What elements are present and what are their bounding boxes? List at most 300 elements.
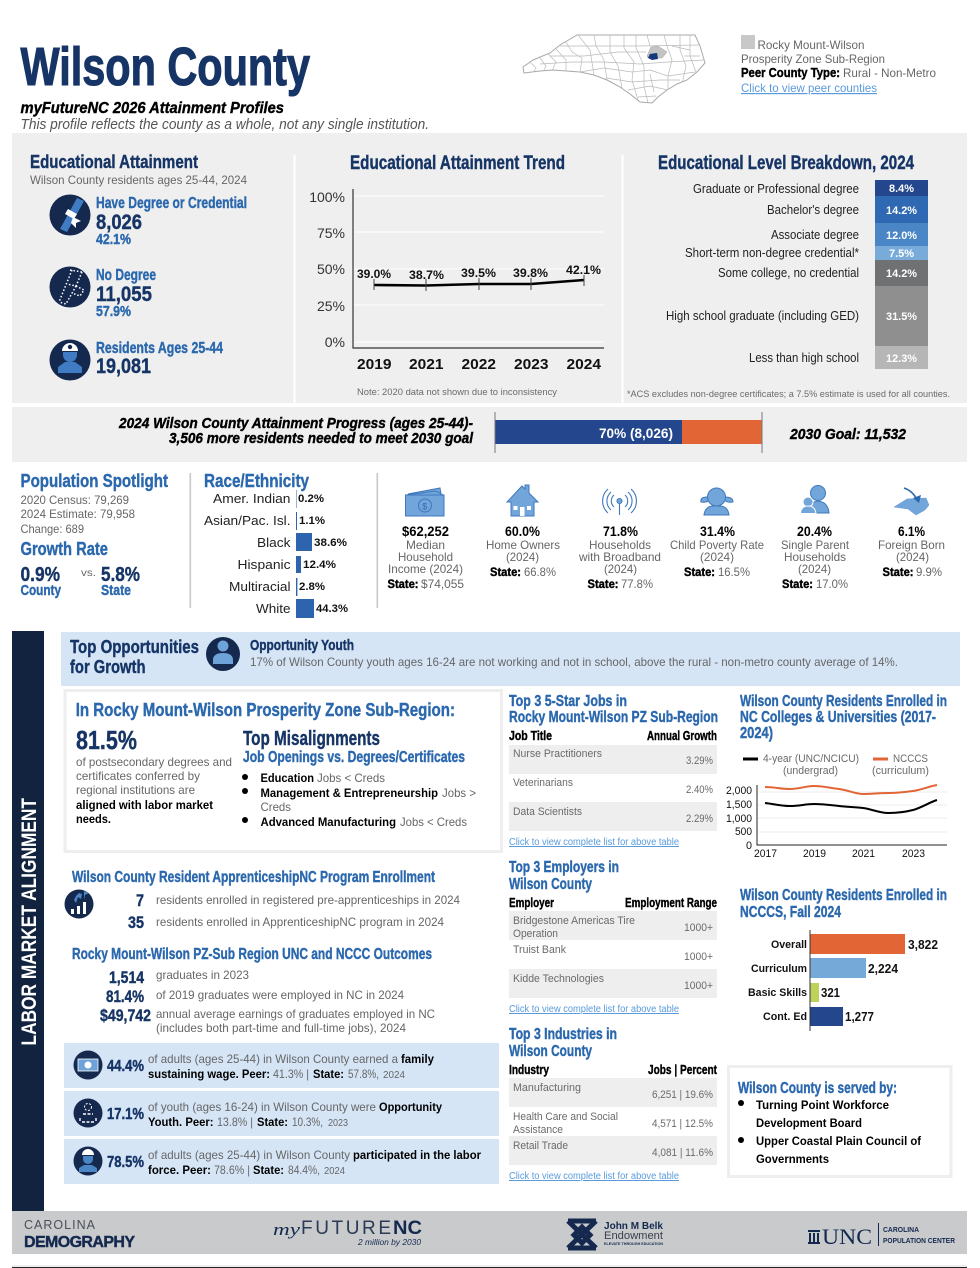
race and ethnicity bar chart: 0.2% (298, 493, 324, 505)
race and ethnicity bar chart: 38.6% (314, 537, 347, 549)
icon: opportunity youth (206, 637, 240, 671)
icon: climbing chart (64, 890, 94, 918)
card: served by (728, 1066, 951, 1176)
top misalignments list (242, 728, 476, 829)
subtitle: myFutureNC 2026 Attainment Profiles (20, 100, 284, 117)
callout: family sustaining wage: family (401, 1052, 434, 1066)
progress text: 2024 Wilson County Attainment Progress (ages 25-44)- (118, 416, 473, 432)
logo: john m belk endowment (568, 1221, 663, 1248)
stat: broadband: with Broadband (578, 550, 661, 564)
logo: unc carolina population center: CAROLINA (883, 1227, 919, 1234)
race and ethnicity bar chart: Hispanic (238, 557, 291, 572)
line chart: attainment trend: 39.8% (513, 266, 548, 280)
icon: money (406, 488, 444, 516)
table: top employers: Employer (509, 895, 554, 910)
stat: home owners: Home Owners (486, 538, 560, 552)
race and ethnicity bar chart: Race/Ethnicity (204, 470, 310, 491)
table: 5-star jobs (509, 693, 718, 848)
callout: labor force participation: 78.5% (107, 1154, 144, 1171)
table: top employers: Kidde Technologies (513, 973, 604, 985)
population spotlight (20, 470, 168, 599)
stat: foreign born: 6.1% (898, 523, 925, 539)
stacked bar: education levels: 7.5% (889, 248, 914, 260)
table: top employers: 1000+ (684, 922, 713, 934)
logo: carolina demography: CAROLINA (24, 1218, 96, 1232)
apprenticeship enrollment: 7 (136, 891, 144, 910)
table: top industries (509, 1026, 718, 1182)
logo: carolina demography (24, 1218, 135, 1251)
logo: myfuturenc: my (273, 1220, 301, 1239)
line chart: college enrollment: 2024) (740, 725, 773, 742)
apprenticeship enrollment: 35 (128, 913, 144, 932)
side band: labor market alignment (12, 631, 44, 1211)
unc and nccc outcomes: $49,742 (100, 1007, 151, 1025)
table: top employers: 1000+ (684, 951, 713, 963)
bar chart: nccc enrollment: 3,822 (908, 937, 938, 952)
card heading: In Rocky Mount-Wilson Prosperity Zone Sub-Region: (76, 699, 455, 720)
race and ethnicity bar chart (204, 470, 348, 618)
stat: child poverty: (2024) (700, 550, 734, 564)
bar chart: nccc enrollment: 321 (821, 985, 840, 1000)
callout: family sustaining wage: of adults (ages 25-44) in Wilson County earned a (148, 1052, 398, 1066)
callout: opportunity youth: Youth. Peer: (148, 1115, 214, 1129)
profile note: This profile reflects the county as a whole, not any single institution. (20, 117, 429, 133)
callout: labor force participation: 2024 (324, 1166, 345, 1177)
stat: foreign born: Foreign Born (878, 538, 945, 552)
table: 5-star jobs: Top 3 5-Star Jobs in (509, 693, 627, 710)
race and ethnicity bar chart: Asian/Pac. Isl. (204, 513, 290, 528)
stacked bar: education levels: Some college, no credential (718, 266, 859, 280)
callout: opportunity youth: 17.1% (107, 1106, 144, 1123)
line chart: attainment trend: 2022 (462, 356, 496, 373)
stat: median household income: $74,055 (421, 577, 464, 591)
stat: aligned credentials: aligned with labor market (76, 798, 213, 812)
line chart: college enrollment: 500 (735, 826, 752, 838)
card: prosperity zone sub-region (65, 690, 502, 852)
map legend: Prosperity Zone Sub-Region (741, 52, 885, 66)
logo: myfuturenc (273, 1218, 422, 1247)
table: top employers: Top 3 Employers in (509, 859, 619, 876)
chart legend: NCCCS (893, 753, 928, 765)
callout: opportunity youth: 2023 (328, 1118, 348, 1129)
stat: home owners: 60.0% (505, 523, 540, 539)
line chart: attainment trend: 2024 (566, 356, 602, 373)
race and ethnicity bar chart: White (256, 601, 290, 616)
line chart: college enrollment: 2017 (754, 848, 777, 860)
logo: john m belk endowment: ELEVATE THROUGH EDUCATION (604, 1241, 663, 1246)
callout: family sustaining wage (64, 1043, 499, 1088)
stat: aligned credentials: needs. (76, 812, 111, 826)
line chart: college enrollment: 0 (746, 840, 752, 852)
population spotlight: Change: 689 (20, 522, 84, 536)
opportunity youth text (250, 637, 898, 669)
bar chart: nccc enrollment: Basic Skills (748, 987, 807, 999)
callout: family sustaining wage: 41.3% | (273, 1067, 309, 1081)
stat: median household income: $62,252 (402, 523, 449, 539)
top misalignments list: Advanced Manufacturing (260, 815, 396, 829)
stat: broadband: 77.8% (621, 577, 653, 591)
line chart: attainment trend: 75% (317, 225, 345, 241)
table: 5-star jobs: Annual Growth (647, 728, 717, 743)
callout: labor force participation: force. Peer: (148, 1163, 211, 1177)
stat: broadband: Households (589, 538, 651, 552)
stat: aligned credentials: regional institutions are (76, 783, 195, 797)
stat: residents ages 25-44 (96, 340, 223, 378)
stat: single parent: (2024) (798, 562, 831, 576)
bar chart: nccc enrollment: 2,224 (868, 961, 899, 976)
table: top industries: Top 3 Industries in (509, 1026, 617, 1043)
line chart: attainment trend: 50% (317, 261, 345, 277)
growth rate (20, 538, 140, 599)
stat: foreign born: State: (882, 565, 914, 579)
panel: educational attainment (12, 133, 967, 403)
logo: myfuturenc: 2 million by 2030 (357, 1238, 422, 1247)
race and ethnicity bar chart: 2.8% (299, 581, 325, 593)
callout: labor force participation: participated in the labor (353, 1148, 481, 1162)
stat: home owners: State: (490, 565, 521, 579)
icon: unfinished diploma (50, 266, 90, 308)
icon: broadband (603, 489, 636, 515)
stat: child poverty (670, 523, 764, 579)
footer logos (12, 1211, 967, 1268)
callout: family sustaining wage: 44.4% (107, 1058, 144, 1075)
top misalignments list: Job Openings vs. Degrees/Certificates (243, 749, 465, 766)
logo: unc carolina population center: POPULATION CENTER (883, 1238, 955, 1245)
growth rate: 5.8% (101, 564, 140, 586)
callout: opportunity youth: State: (257, 1115, 288, 1129)
stat: aligned credentials: 81.5% (76, 725, 137, 755)
stacked bar: education levels: Graduate or Professional degree (693, 182, 859, 196)
icon: wage (74, 1050, 102, 1080)
trend note: Note: 2020 data not shown due to inconsistency (357, 387, 557, 398)
bar chart: nccc enrollment: Cont. Ed (763, 1011, 807, 1023)
panel: attainment progress (12, 407, 967, 462)
stacked bar: education levels: 14.2% (886, 205, 917, 217)
top misalignments list: Top Misalignments (243, 728, 380, 750)
logo: unc carolina population center (808, 1223, 955, 1249)
icon: money: $ (422, 502, 427, 512)
stat: have degree or credential: 8,026 (96, 211, 142, 234)
bar chart: nccc enrollment: Overall (771, 939, 807, 951)
race and ethnicity bar chart: Black (257, 535, 291, 550)
title: Wilson County (20, 37, 310, 97)
icon: labor force worker (74, 1146, 102, 1176)
stacked bar: education levels: Less than high school (749, 351, 859, 365)
line chart: college enrollment: 1,000 (726, 813, 752, 825)
line chart: college enrollment: 2021 (852, 848, 875, 860)
growth rate: Growth Rate (20, 538, 108, 559)
callout: opportunity youth: Opportunity (379, 1100, 442, 1114)
map legend (741, 35, 936, 95)
map legend: Rocky Mount-Wilson (758, 38, 864, 52)
table: 5-star jobs: Click to view complete list for above table (509, 837, 679, 848)
race and ethnicity bar chart: Amer. Indian (213, 491, 290, 506)
stat: single parent: Single Parent (781, 538, 850, 552)
growth rate: County (20, 583, 61, 599)
stat: median household income: Income (2024) (388, 562, 463, 576)
stat: child poverty: State: (684, 565, 715, 579)
stacked bar: education levels: Short-term non-degree credential* (685, 246, 859, 260)
opportunity youth text: 17% of Wilson County youth ages 16-24 are not working and not in school, above the rural - non-metro county average of 14%. (250, 655, 898, 669)
icon: resident worker (50, 340, 90, 380)
line chart: attainment trend: 39.5% (461, 266, 496, 280)
callout: opportunity youth: 10.3%, (292, 1115, 323, 1129)
stat: median household income (388, 523, 464, 591)
banner heading: for Growth (70, 656, 146, 677)
heading: level breakdown: Educational Level Breakdown, 2024 (658, 153, 914, 174)
stat: median household income: State: (388, 577, 418, 591)
race and ethnicity bar chart: 44.3% (316, 603, 348, 615)
stat: no degree: 57.9% (96, 304, 131, 320)
table: top industries: Health Care and Social (513, 1111, 618, 1123)
stat: aligned credentials: of postsecondary degrees and (76, 755, 232, 769)
callout: labor force participation: State: (253, 1163, 284, 1177)
line chart: attainment trend: 25% (317, 298, 345, 314)
map legend: Rural - Non-Metro (843, 66, 936, 80)
stacked bar: education levels: Bachelor's degree (767, 203, 859, 217)
stat: single parent: State: (782, 577, 813, 591)
table: top employers: Click to view complete list for above table (509, 1004, 679, 1015)
bar chart: nccc enrollment (740, 887, 947, 1031)
stat: broadband: (2024) (604, 562, 637, 576)
table: 5-star jobs: 2.29% (686, 813, 713, 825)
table: 5-star jobs: 2.40% (686, 784, 713, 796)
table: top industries: Wilson County (509, 1043, 592, 1060)
line chart: college enrollment: 2023 (902, 848, 925, 860)
stat: no degree: No Degree (96, 267, 156, 284)
banner heading (70, 636, 199, 677)
callout: opportunity youth: 13.8% | (217, 1115, 253, 1129)
table: top industries: Jobs | Percent (648, 1062, 718, 1077)
top misalignments list: Education (260, 771, 314, 785)
stat: broadband (578, 523, 661, 591)
progress bar (495, 412, 762, 453)
heading: attainment trend: Educational Attainment Trend (350, 153, 565, 174)
table: 5-star jobs: Veterinarians (513, 777, 573, 789)
table: 5-star jobs: Job Title (509, 728, 552, 743)
stat: foreign born: (2024) (896, 550, 929, 564)
callout: labor force participation: 84.4%, (288, 1163, 320, 1177)
chart legend: (undergrad) (783, 765, 838, 777)
unc and nccc outcomes: annual average earnings of graduates employed in NC (156, 1007, 435, 1021)
population spotlight: 2020 Census: 79,269 (20, 493, 129, 507)
map legend: Peer County Type: (741, 66, 840, 80)
stat: child poverty: 16.5% (718, 565, 750, 579)
icon: parent and child (800, 486, 829, 514)
line chart: college enrollment: 2,000 (726, 785, 752, 797)
table: top industries: 4,571 | 12.5% (652, 1118, 713, 1130)
stat: single parent: 20.4% (797, 523, 832, 539)
breakdown footnote: *ACS excludes non-degree certificates; a 7.5% estimate is used for all counties. (627, 389, 950, 400)
growth rate: vs. (81, 568, 96, 579)
icon: house (507, 485, 538, 516)
table: 5-star jobs: Nurse Practitioners (513, 748, 602, 760)
race and ethnicity bar chart: Multiracial (229, 579, 291, 594)
unc and nccc outcomes: graduates in 2023 (156, 968, 249, 982)
population spotlight: Population Spotlight (20, 470, 168, 491)
callout: labor force participation: 78.6% | (214, 1163, 250, 1177)
line chart: attainment trend: 38.7% (409, 268, 444, 282)
progress text (118, 416, 474, 447)
stat: foreign born: 9.9% (916, 565, 942, 579)
banner: top opportunities (61, 632, 960, 686)
table: top industries: Industry (509, 1062, 550, 1077)
unc and nccc outcomes: 1,514 (109, 969, 145, 987)
table: top employers: Truist Bank (513, 944, 566, 956)
bar chart: nccc enrollment: NCCCS, Fall 2024 (740, 904, 841, 921)
logo: john m belk endowment: Endowment (604, 1230, 663, 1242)
line chart: college enrollment: 2019 (803, 848, 826, 860)
line chart: attainment trend: 2023 (514, 356, 548, 373)
logo: carolina demography: DEMOGRAPHY (24, 1234, 135, 1251)
table: top industries: Retail Trade (513, 1140, 568, 1152)
table: top industries: 4,081 | 11.6% (652, 1147, 713, 1159)
callout: opportunity youth (64, 1091, 499, 1136)
chart legend: 4-year (UNC/NCICU) (763, 753, 859, 765)
stacked bar: education levels: High school graduate (including GED) (666, 309, 859, 323)
logo: john m belk endowment: John M Belk (604, 1221, 663, 1232)
table: 5-star jobs: Rocky Mount-Wilson PZ Sub-Region (509, 709, 718, 726)
stacked bar: education levels: 14.2% (886, 268, 917, 280)
logo: myfuturenc: FUTURE (301, 1218, 391, 1239)
callout: family sustaining wage: sustaining wage. Peer: (148, 1067, 270, 1081)
icon: diploma (50, 194, 90, 236)
stat: no degree: 11,055 (96, 283, 152, 306)
stat: residents ages 25-44: 19,081 (96, 355, 151, 378)
attainment subheading: Wilson County residents ages 25-44, 2024 (30, 173, 247, 187)
line chart: college enrollment (726, 693, 947, 860)
stacked bar: education levels (666, 180, 928, 369)
table: 5-star jobs: Data Scientists (513, 806, 582, 818)
stacked bar: education levels: 12.3% (886, 353, 917, 365)
race and ethnicity bar chart: 1.1% (299, 515, 325, 527)
card: served by: Upper Coastal Plain Council of (756, 1134, 922, 1148)
callout: family sustaining wage: 57.8%, (348, 1067, 379, 1081)
table: top employers: Employment Range (625, 895, 717, 910)
stat: aligned credentials (76, 725, 232, 826)
icon: foreign born (894, 488, 929, 515)
stat: home owners: (2024) (506, 550, 539, 564)
stat: foreign born (878, 523, 945, 579)
top misalignments list: Jobs > (442, 786, 476, 800)
table: top employers (509, 859, 717, 1015)
callout: opportunity youth: of youth (ages 16-24) in Wilson County were (148, 1100, 376, 1114)
unc and nccc outcomes: 81.4% (106, 988, 144, 1006)
stat: aligned credentials: certificates conferred by (76, 769, 200, 783)
stat: median household income: Household (398, 550, 453, 564)
stat: broadband: State: (588, 577, 618, 591)
logo: unc carolina population center: UNC (822, 1224, 872, 1249)
icon: child (701, 488, 733, 515)
stat: home owners (486, 523, 560, 579)
table: top industries: Click to view complete list for above table (509, 1171, 679, 1182)
table: top employers: Bridgestone Americas Tire (513, 915, 635, 927)
bar chart: nccc enrollment: Curriculum (751, 963, 807, 975)
card: served by: Development Board (756, 1116, 862, 1130)
callout: family sustaining wage: 2024 (383, 1070, 405, 1081)
unc and nccc outcomes: of 2019 graduates were employed in NC in 2024 (156, 988, 404, 1002)
banner heading: Top Opportunities (70, 636, 199, 657)
population spotlight: 2024 Estimate: 79,958 (20, 507, 135, 521)
chart legend (743, 753, 929, 777)
stat: home owners: 66.8% (524, 565, 556, 579)
heading: educational attainment: Educational Attainment (30, 151, 198, 172)
table: top industries: 6,251 | 19.6% (652, 1089, 713, 1101)
stat: median household income: Median (406, 538, 445, 552)
card: served by: Wilson County is served by: (738, 1080, 897, 1097)
growth rate: 0.9% (20, 564, 60, 586)
card: served by: Governments (756, 1152, 829, 1166)
apprenticeship enrollment: Wilson County Resident ApprenticeshipNC Program Enrollment (72, 869, 435, 886)
card: served by: Turning Point Workforce (756, 1098, 889, 1112)
icon: youth outline (74, 1098, 102, 1128)
logo: myfuturenc: NC (393, 1218, 422, 1239)
stat: single parent: Households (784, 550, 846, 564)
callout: family sustaining wage: State: (313, 1067, 344, 1081)
stat: have degree or credential (96, 195, 247, 248)
stat: residents ages 25-44: Residents Ages 25-44 (96, 340, 223, 357)
top misalignments list: Jobs < Creds (317, 771, 385, 785)
stat: child poverty: 31.4% (700, 523, 735, 539)
progress text: 3,506 more residents needed to meet 2030 goal (169, 431, 474, 447)
line chart: attainment trend: 2021 (409, 356, 444, 373)
line chart: attainment trend (309, 189, 604, 373)
map legend: Click to view peer counties (741, 81, 877, 95)
table: top employers: Wilson County (509, 876, 592, 893)
apprenticeship enrollment (64, 869, 460, 932)
line chart: attainment trend: 0% (325, 334, 345, 350)
unc and nccc outcomes (72, 946, 435, 1035)
callout: labor force participation: of adults (ages 25-44) in Wilson County (148, 1148, 350, 1162)
stat: broadband: 71.8% (603, 523, 638, 539)
top misalignments list: Creds (260, 800, 291, 814)
line chart: attainment trend: 100% (309, 189, 345, 205)
stat: single parent: 17.0% (816, 577, 848, 591)
stat: have degree or credential: Have Degree or Credential (96, 195, 247, 212)
line chart: college enrollment: 1,500 (726, 799, 752, 811)
stat: single parent (781, 523, 850, 591)
stacked bar: education levels: 8.4% (889, 183, 914, 195)
side band: labor market alignment: LABOR MARKET ALIGNMENT (18, 798, 41, 1046)
table: top employers: Operation (513, 928, 558, 940)
line chart: attainment trend: 2019 (357, 356, 392, 373)
unc and nccc outcomes: (includes both part-time and full-time jobs), 2024 (156, 1021, 406, 1035)
bar chart: nccc enrollment: 1,277 (845, 1009, 874, 1024)
stat: no degree (96, 267, 156, 320)
chart legend: (curriculum) (872, 765, 929, 777)
line chart: attainment trend: 42.1% (566, 263, 601, 277)
unc and nccc outcomes: Rocky Mount-Wilson PZ-Sub Region UNC and NCCC Outcomes (72, 946, 432, 963)
callout: labor force participation (64, 1139, 499, 1184)
north carolina county map (523, 35, 705, 103)
progress bar: 70% (8,026) (599, 425, 673, 441)
apprenticeship enrollment: residents enrolled in registered pre-apprenticeships in 2024 (156, 893, 460, 907)
table: top industries: Assistance (513, 1124, 563, 1136)
stat: have degree or credential: 42.1% (96, 232, 131, 248)
2030 goal: 2030 Goal: 11,532 (789, 426, 907, 443)
stacked bar: education levels: Associate degree (771, 228, 859, 242)
opportunity youth text: Opportunity Youth (250, 637, 354, 654)
stat: child poverty: Child Poverty Rate (670, 538, 764, 552)
table: top industries: Manufacturing (513, 1082, 581, 1094)
stacked bar: education levels: 31.5% (886, 311, 917, 323)
apprenticeship enrollment: residents enrolled in ApprenticeshipNC program in 2024 (156, 915, 444, 929)
line chart: attainment trend: 39.0% (357, 267, 391, 281)
growth rate: State (101, 583, 131, 599)
table: 5-star jobs: 3.29% (686, 755, 713, 767)
top misalignments list: Jobs < Creds (400, 815, 467, 829)
table: top employers: 1000+ (684, 980, 713, 992)
